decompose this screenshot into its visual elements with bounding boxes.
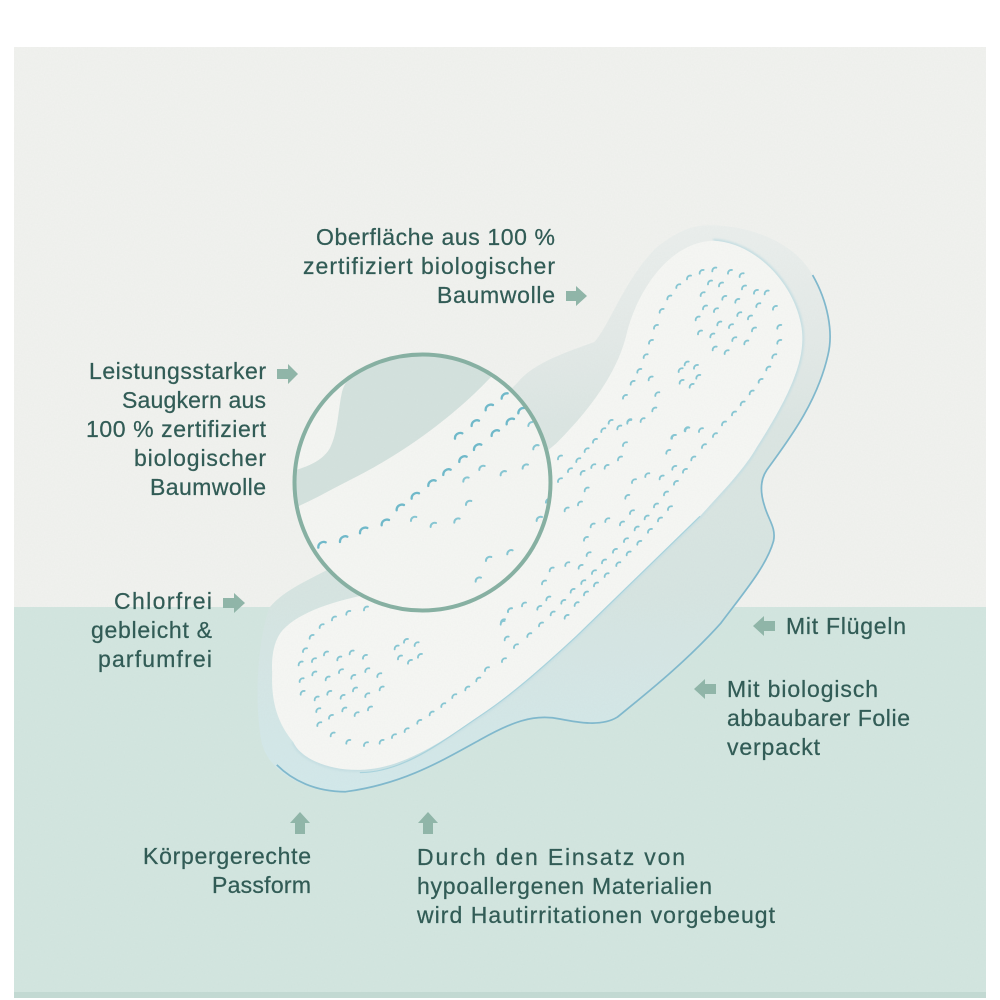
text: Saugkern [86, 358, 267, 500]
text: Saugkern: Saugkern aus [122, 387, 266, 413]
arrow: Passform [290, 812, 310, 834]
text: Saugkern: Leistungsstarker [89, 358, 266, 384]
arrow: Saugkern [277, 364, 298, 384]
text: Saugkern: biologischer [134, 445, 266, 471]
text: Chlorfrei [91, 588, 212, 672]
text: Materialien: wird Hautirritationen vorgebeugt [416, 902, 776, 928]
embossed dots: middle of pad [501, 420, 695, 640]
text: Chlorfrei: Chlorfrei [114, 588, 212, 614]
panel: lower green background [14, 607, 986, 998]
text: Oberfläche [303, 224, 555, 308]
text: Materialien: hypoallergenen Materialien [417, 873, 712, 899]
arrow: Folie [694, 679, 716, 699]
arrow: Chlorfrei [223, 593, 245, 613]
arrow: Materialien [418, 812, 438, 834]
text: Oberfläche: zertifiziert biologischer [303, 253, 555, 279]
text: Saugkern: Baumwolle [150, 474, 266, 500]
embossed dots: lower end of pad [299, 607, 518, 746]
text: Chlorfrei: parfumfrei [98, 646, 212, 672]
pad blue seam line [360, 516, 700, 773]
pad outer blue edge [277, 275, 830, 792]
embossed dots: top end of pad [623, 268, 781, 448]
circle outline [294, 354, 550, 610]
pad outer wings and rim [257, 225, 830, 792]
text: Chlorfrei: gebleicht & [91, 617, 212, 643]
text: Oberfläche: Oberfläche aus 100 % [316, 224, 555, 250]
text: Passform [143, 843, 311, 898]
arrow: Mit Flügeln [753, 616, 775, 636]
text: Materialien [416, 844, 776, 928]
text: Folie [727, 676, 910, 760]
text: Folie: abbaubarer Folie [727, 705, 910, 731]
text: Folie: Mit biologisch [727, 676, 878, 702]
pad absorbent top surface [272, 241, 802, 770]
text: Mit Flügeln: Mit Flügeln [786, 613, 906, 639]
text: Passform: Körpergerechte [143, 843, 311, 869]
text: Materialien: Durch den Einsatz von [417, 844, 685, 870]
text: Passform: Passform [212, 872, 311, 898]
text: Oberfläche: Baumwolle [437, 282, 555, 308]
pad soft inner shade [293, 241, 802, 770]
magnifying circle [285, 340, 550, 610]
panel: upper paper background [14, 47, 986, 608]
arrow: Oberfläche [566, 286, 587, 306]
text: Saugkern: 100 % zertifiziert [86, 416, 267, 442]
sanitary pad illustration [257, 225, 830, 792]
magnified embossed dots [318, 393, 549, 582]
magnified wing area [296, 356, 491, 506]
text: Folie: verpackt [727, 734, 821, 760]
